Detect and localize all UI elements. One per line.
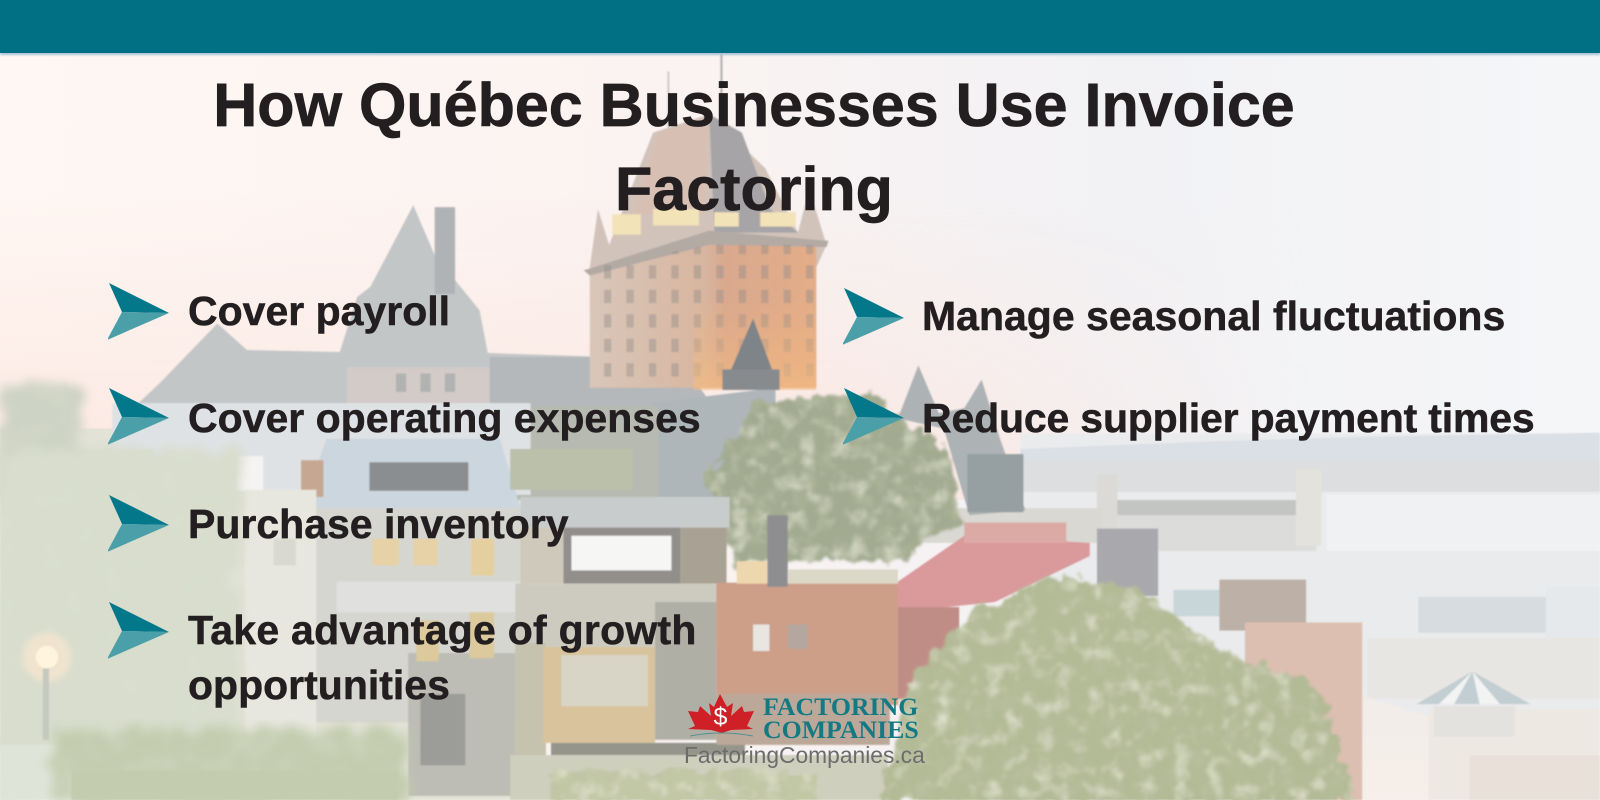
brown buildings right of tree bbox=[1219, 580, 1306, 631]
logo wordmark: COMPANIES bbox=[763, 715, 919, 744]
icon: arrow bbox=[843, 288, 904, 345]
title: Factoring bbox=[615, 155, 893, 223]
brick building bbox=[716, 583, 898, 705]
river bbox=[1355, 694, 1600, 800]
label bbox=[188, 607, 697, 708]
Château Frontenac tower bbox=[720, 51, 722, 120]
top bar bbox=[0, 0, 1600, 53]
pale ground behind left side bbox=[0, 429, 520, 800]
logo wordmark: FACTORING bbox=[763, 692, 918, 721]
website url: FactoringCompanies.ca bbox=[684, 742, 925, 768]
carousel bbox=[1416, 671, 1531, 704]
list item: Manage seasonal fluctuations bbox=[843, 288, 1505, 345]
icon: arrow bbox=[108, 283, 169, 340]
list item: Cover operating expenses bbox=[108, 388, 701, 445]
mid green tree behind bbox=[510, 449, 633, 490]
central house bbox=[112, 403, 531, 495]
label: Cover payroll bbox=[188, 288, 450, 334]
icon: arrow bbox=[108, 388, 169, 445]
icon: red maple leaf with dollar sign: $ bbox=[714, 703, 728, 731]
left trees bbox=[0, 449, 153, 800]
label: Purchase inventory bbox=[188, 501, 569, 547]
ground below houses bbox=[510, 755, 888, 800]
icon: arrow bbox=[108, 495, 169, 552]
icon: arrow bbox=[843, 388, 904, 445]
list item: Cover payroll bbox=[108, 283, 450, 340]
label: Take advantage of growth bbox=[188, 607, 697, 653]
street lamp glow bbox=[22, 633, 71, 682]
far right: hills, harbour and city bbox=[1020, 434, 1600, 800]
label: opportunities bbox=[188, 662, 450, 708]
left castle bbox=[122, 205, 776, 459]
big foreground trees bbox=[918, 735, 1337, 800]
logo wordmark bbox=[763, 692, 919, 744]
list item: Reduce supplier payment times bbox=[843, 388, 1535, 445]
icon: arrow bbox=[108, 602, 169, 659]
label: Manage seasonal fluctuations bbox=[922, 293, 1505, 339]
list item: Take advantage of growth opportunities bbox=[108, 602, 697, 708]
list item: Purchase inventory bbox=[108, 495, 569, 552]
logo: Factoring Companies bbox=[684, 692, 925, 768]
red roof building bbox=[898, 536, 1090, 612]
title: How Québec Businesses Use Invoice bbox=[213, 71, 1295, 139]
label: Reduce supplier payment times bbox=[922, 395, 1535, 441]
icon: red maple leaf with dollar sign bbox=[688, 694, 754, 736]
title bbox=[213, 71, 1295, 224]
label: Cover operating expenses bbox=[188, 395, 701, 441]
terrace house bbox=[520, 497, 730, 528]
twin spires bbox=[898, 365, 1026, 515]
